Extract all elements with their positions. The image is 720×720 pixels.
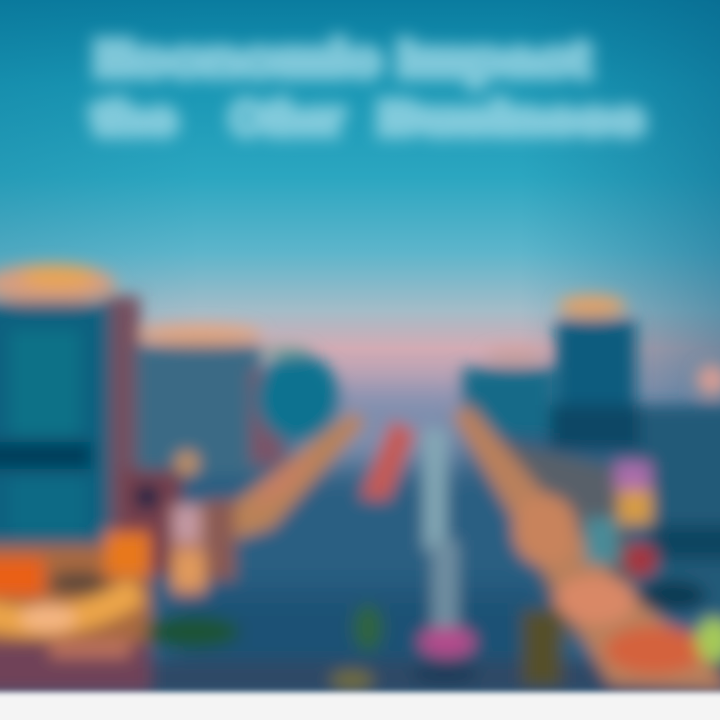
far right building <box>640 364 720 610</box>
centre red vehicle <box>360 420 416 500</box>
right tower <box>550 295 642 450</box>
left street lights <box>120 412 366 595</box>
dark band <box>0 442 92 469</box>
right mid building <box>462 348 554 434</box>
title: Other <box>230 92 344 144</box>
right street lights <box>452 405 720 690</box>
ground and road <box>0 395 720 715</box>
left tower <box>0 264 140 596</box>
right colored signs <box>585 462 720 662</box>
bottom white strip <box>0 692 720 720</box>
city scene <box>0 264 720 715</box>
title: Business <box>378 92 644 144</box>
left lower orange lights <box>0 532 150 692</box>
tower side wall <box>105 296 140 596</box>
left trees <box>144 604 383 690</box>
centre lane highlight <box>424 430 458 635</box>
left mid building <box>136 325 340 475</box>
foreground details <box>411 610 562 686</box>
title: Economic Impact <box>94 31 590 87</box>
tower dome <box>0 264 116 304</box>
title: the <box>92 92 176 144</box>
title <box>92 31 644 144</box>
tower facade <box>0 302 110 545</box>
